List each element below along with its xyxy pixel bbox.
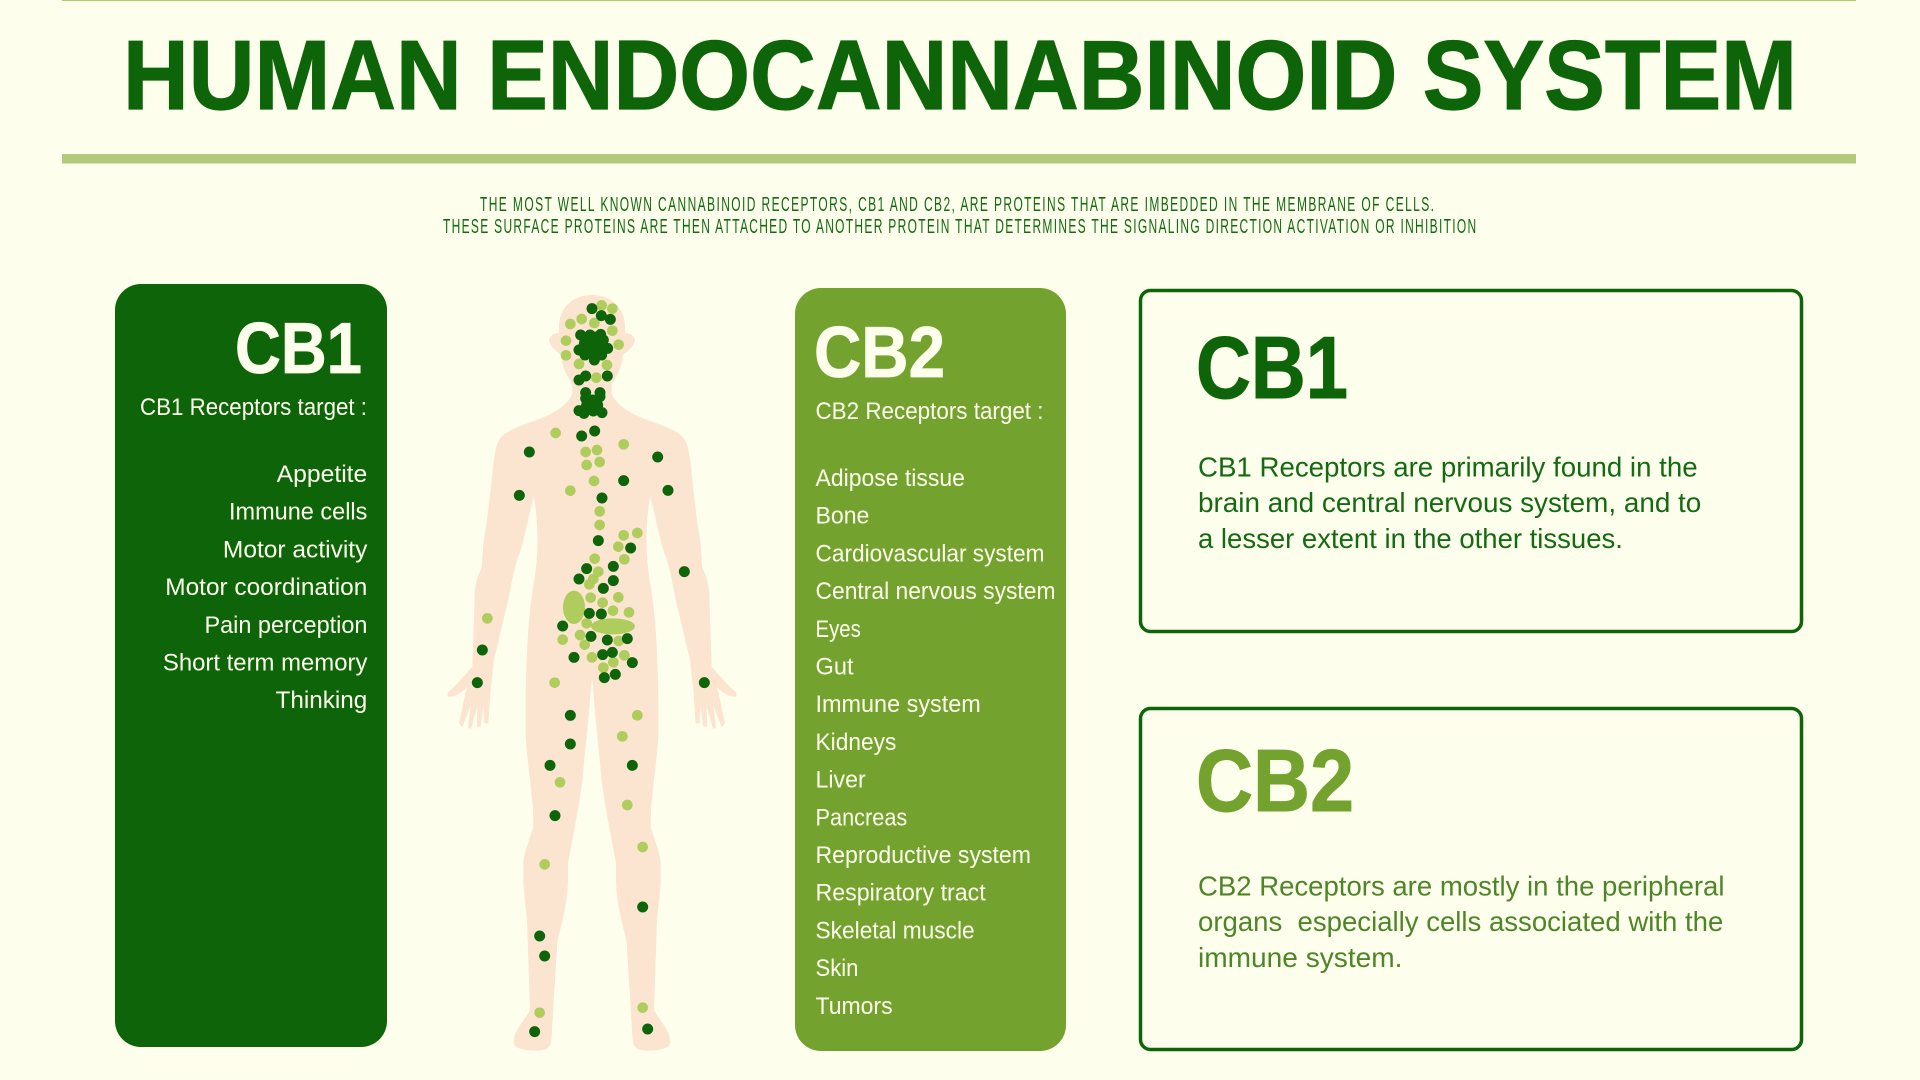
CB2 panel heading: CB2 — [814, 313, 945, 393]
CB2 target list: Kidneys — [816, 729, 896, 756]
CB1 target list: Motor coordination — [165, 574, 367, 601]
CB1 target list: Pain perception — [204, 612, 367, 639]
CB1 target list: Short term memory — [163, 650, 367, 676]
CB2 description text: CB2 Receptors are mostly in the peripheral — [1198, 870, 1724, 902]
CB1 receptor markers — [472, 303, 710, 1037]
title: HUMAN ENDOCANNABINOID SYSTEM — [123, 20, 1797, 130]
CB1 target list: Appetite — [277, 461, 367, 488]
CB2 box heading: CB2 — [1196, 731, 1354, 830]
CB2 target list: Immune system — [816, 691, 981, 718]
CB2 target list: Respiratory tract — [816, 880, 986, 907]
CB1 target list: Motor activity — [223, 536, 367, 563]
CB2 target list: Skin — [816, 955, 858, 982]
CB1 target list — [163, 461, 367, 714]
panel: CB2 targets — [795, 288, 1066, 1051]
CB1 description text: CB1 Receptors are primarily found in the — [1198, 452, 1698, 482]
CB1 panel subheading: CB1 Receptors target : — [140, 394, 367, 421]
CB2 target list — [816, 465, 1056, 1020]
CB1 target list: Immune cells — [229, 499, 367, 526]
intro text: THE MOST WELL KNOWN CANNABINOID RECEPTORS, CB1 AND CB2, ARE PROTEINS THAT ARE IMBEDDED IN THE MEMBRANE OF CELLS. — [480, 194, 1434, 216]
CB2 target list: Liver — [816, 767, 866, 794]
CB1 description text: a lesser extent in the other tissues. — [1198, 523, 1623, 554]
CB2 target list: Bone — [816, 503, 869, 530]
CB1 description text: brain and central nervous system, and to — [1198, 487, 1701, 518]
CB2 target list: Central nervous system — [816, 578, 1056, 605]
CB2 target list: Gut — [816, 654, 854, 680]
intro text — [443, 194, 1476, 238]
CB2 description text — [1198, 870, 1724, 973]
CB2 target list: Adipose tissue — [816, 465, 965, 492]
panel: CB1 targets — [115, 284, 387, 1047]
body silhouette — [447, 295, 737, 1051]
CB2 target list: Cardiovascular system — [816, 540, 1044, 567]
CB2 description text: immune system. — [1198, 942, 1402, 973]
CB2 target list: Reproductive system — [816, 842, 1031, 869]
CB1 box heading: CB1 — [1196, 318, 1348, 417]
intro text: THESE SURFACE PROTEINS ARE THEN ATTACHED TO ANOTHER PROTEIN THAT DETERMINES THE SIGNALING DIRECTION ACTIVATION OR INHIBITION — [443, 216, 1476, 238]
CB2 target list: Eyes — [816, 616, 861, 643]
panel: CB1 description — [1140, 290, 1802, 632]
CB2 target list: Skeletal muscle — [816, 917, 975, 944]
CB2 target list: Pancreas — [816, 804, 907, 831]
panel: CB2 description — [1140, 708, 1802, 1050]
human body diagram — [447, 295, 737, 1051]
CB2 receptor markers — [482, 300, 648, 1018]
CB2 panel subheading: CB2 Receptors target : — [816, 398, 1044, 425]
CB1 description text — [1198, 452, 1701, 554]
CB2 description text: organs especially cells associated with the — [1198, 906, 1723, 937]
CB1 target list: Thinking — [276, 687, 367, 714]
CB2 target list: Tumors — [816, 993, 893, 1020]
CB1 panel heading: CB1 — [235, 309, 362, 389]
